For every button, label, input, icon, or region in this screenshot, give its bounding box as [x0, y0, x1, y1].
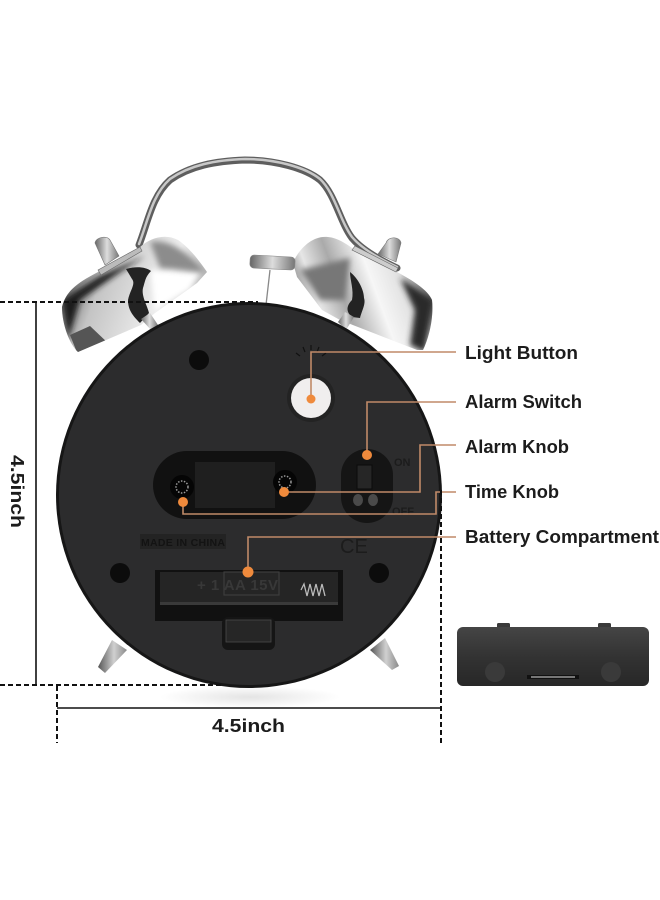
left bell: [62, 237, 207, 355]
on label: ON: [394, 457, 411, 469]
label light button: Light Button: [465, 343, 578, 363]
bell knob left: [95, 237, 119, 265]
bell post left: [141, 313, 158, 330]
clock feet: [98, 638, 399, 673]
embossed body markings: [140, 457, 414, 558]
ce mark: CE: [340, 536, 368, 558]
hammer: [250, 255, 295, 305]
width label: 4.5inch: [212, 716, 285, 736]
height label: 4.5inch: [7, 455, 27, 528]
made in china plate: MADE IN CHINA: [141, 537, 225, 549]
label alarm knob: Alarm Knob: [465, 437, 569, 457]
label battery compartment: Battery Compartment: [465, 527, 659, 547]
battery label: + 1 AA 15V: [197, 577, 278, 594]
alarm switch recess: [341, 449, 393, 523]
battery latch: [222, 617, 275, 650]
off label: OFF: [392, 506, 414, 518]
battery cover: [457, 623, 649, 686]
battery compartment: [155, 570, 343, 650]
knob recess: [153, 451, 316, 519]
dimension lines: [0, 302, 441, 743]
callout lines: [183, 352, 456, 572]
label alarm switch: Alarm Switch: [465, 392, 582, 412]
callout labels: [465, 343, 659, 547]
bell post right: [338, 312, 354, 330]
callout dots: [178, 394, 372, 578]
table reflection: [160, 686, 340, 708]
screw holes: [110, 350, 389, 583]
bell knob right: [378, 238, 401, 262]
label time knob: Time Knob: [465, 482, 559, 502]
right bell: [293, 237, 434, 352]
light button: [287, 345, 335, 422]
clock handle: [139, 159, 397, 268]
clock body: [56, 302, 442, 688]
infographic canvas: [0, 156, 659, 743]
